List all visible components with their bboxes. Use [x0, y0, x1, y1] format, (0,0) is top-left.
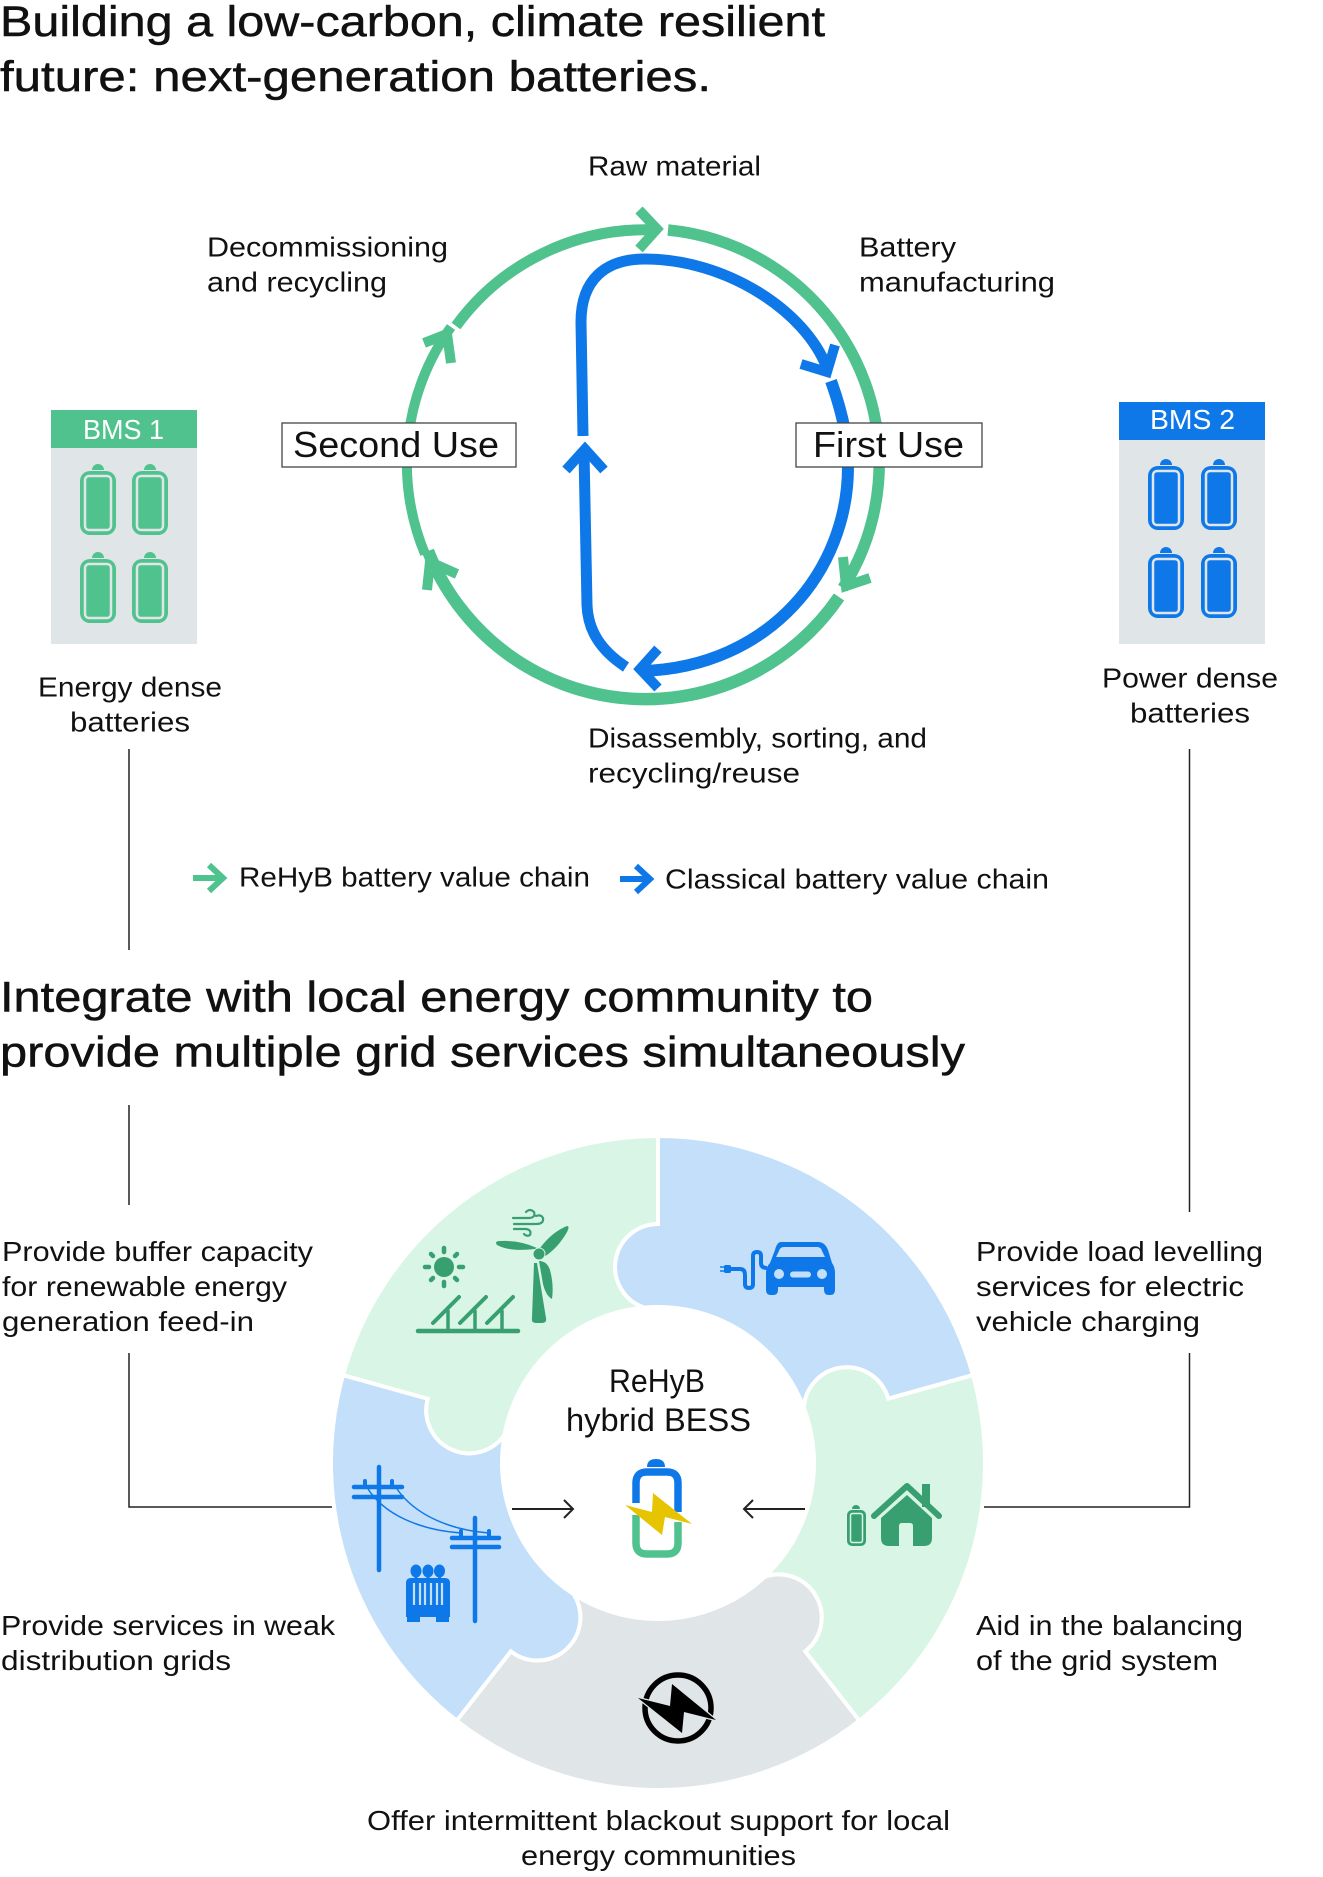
section heading: provide multiple grid services simultaneously	[0, 1028, 966, 1076]
label: decommissioning: and recycling	[207, 266, 387, 298]
icon: battery cells green	[80, 464, 168, 623]
label: grid balancing	[976, 1610, 1243, 1676]
center label	[566, 1363, 751, 1438]
label: buffer capacity	[2, 1236, 313, 1337]
arrow: right to center	[744, 1500, 805, 1518]
icon: hybrid battery	[625, 1459, 692, 1554]
segment: blackout support	[457, 1574, 859, 1790]
label: disassembly: recycling/reuse	[588, 758, 800, 788]
arrow: blue legend	[620, 866, 650, 892]
label: disassembly: Disassembly, sorting, and	[588, 722, 927, 754]
icon: house with battery	[847, 1484, 939, 1546]
label: power dense batteries: batteries	[1130, 698, 1250, 728]
segment: renewable feed-in	[343, 1136, 658, 1453]
label: load levelling: Provide load levelling	[976, 1236, 1263, 1267]
title: future: next-generation batteries.	[0, 53, 711, 101]
central battery	[566, 1363, 751, 1554]
center label: ReHyB	[609, 1363, 705, 1399]
label: grid balancing: of the grid system	[976, 1645, 1218, 1676]
title	[0, 0, 825, 101]
label: blackout support: energy communities	[521, 1840, 796, 1871]
icon: battery cells blue	[1148, 459, 1237, 618]
label: load levelling: services for electric	[976, 1271, 1244, 1302]
label: blackout support	[367, 1805, 950, 1871]
label: buffer capacity: for renewable energy	[2, 1271, 287, 1302]
icon: blackout bolt	[638, 1675, 716, 1741]
panel: BMS 2	[1119, 402, 1265, 644]
connector line: left	[129, 749, 333, 1507]
label: decommissioning: Decommissioning	[207, 232, 448, 262]
label: power dense batteries	[1102, 662, 1278, 728]
label: energy dense batteries: Energy dense	[38, 672, 222, 702]
label: battery manufacturing: Battery	[859, 232, 956, 262]
segment: weak grids	[331, 1375, 580, 1721]
label: battery manufacturing	[859, 232, 1055, 298]
label: weak grids: distribution grids	[1, 1645, 231, 1676]
green ReHyB cycle ring with arrows	[407, 210, 879, 699]
panel: BMS 1	[51, 410, 197, 644]
first use label: First Use	[813, 424, 964, 465]
blue classical chain path with arrows	[566, 259, 848, 688]
label: weak grids	[1, 1610, 336, 1676]
puzzle wheel	[331, 1136, 985, 1790]
label: grid balancing: Aid in the balancing	[976, 1610, 1243, 1641]
panel: BMS 2: BMS 2	[1150, 404, 1235, 435]
icon: EV car and charging cable	[720, 1242, 835, 1295]
connector line: right	[984, 749, 1190, 1507]
label: buffer capacity: Provide buffer capacity	[2, 1236, 313, 1267]
second use label: Second Use	[293, 424, 499, 465]
label: weak grids: Provide services in weak	[1, 1610, 336, 1641]
legend: ReHyB battery value chain	[239, 862, 590, 892]
segment: EV charging	[615, 1136, 973, 1408]
label: power dense batteries: Power dense	[1102, 662, 1278, 694]
legend	[193, 862, 1049, 894]
panel: BMS 1: BMS 1	[83, 414, 164, 445]
center label: hybrid BESS	[566, 1402, 751, 1438]
icon: solar and wind	[418, 1210, 568, 1331]
label: disassembly	[588, 722, 927, 788]
section heading: Integrate with local energy community to	[0, 974, 873, 1022]
icon: power grid and transformer	[354, 1467, 499, 1622]
label: blackout support: Offer intermittent blackout support for local	[367, 1805, 950, 1836]
label: buffer capacity: generation feed-in	[2, 1306, 254, 1337]
label: battery manufacturing: manufacturing	[859, 266, 1055, 298]
label: decommissioning	[207, 232, 448, 298]
legend: Classical battery value chain	[665, 864, 1049, 894]
label: raw material: Raw material	[588, 150, 761, 182]
segment: grid balancing	[765, 1367, 985, 1721]
label: energy dense batteries: batteries	[70, 706, 190, 738]
label: energy dense batteries	[38, 672, 222, 738]
section heading	[0, 974, 966, 1076]
value chain cycle diagram	[207, 150, 1055, 788]
arrow: left to center	[512, 1500, 573, 1518]
label: load levelling: vehicle charging	[976, 1306, 1200, 1337]
arrow: green legend	[193, 865, 223, 891]
label: load levelling	[976, 1236, 1263, 1337]
